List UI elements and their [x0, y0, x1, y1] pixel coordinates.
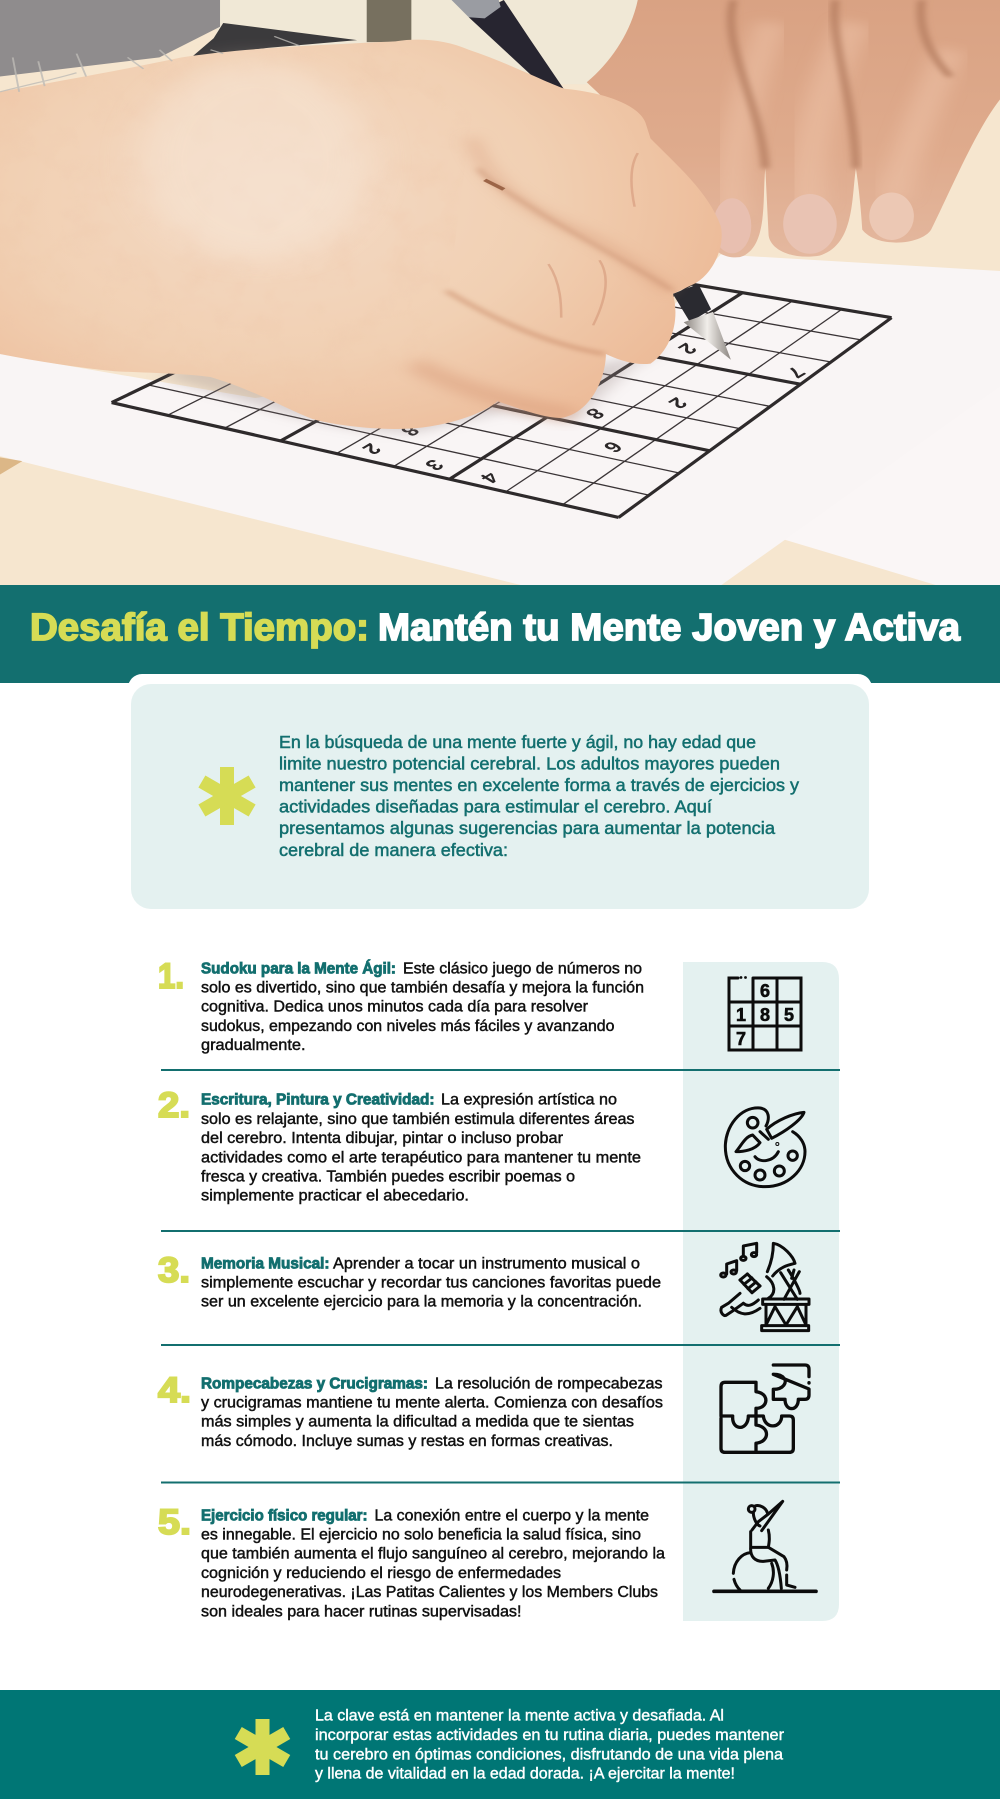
- footer text: La clave está en mantener la mente activa y desafiada. Al: [315, 1708, 724, 1725]
- photo: hand solving a sudoku: [0, 0, 1000, 586]
- body 1: cognitiva. Dedica unos minutos cada día para resolver: [201, 999, 588, 1016]
- body 5: son ideales para hacer rutinas supervisadas!: [201, 1603, 522, 1620]
- body 5: cognición y reduciendo el riesgo de enfermedades: [201, 1565, 561, 1582]
- sudoku printed digits: 2: [672, 340, 701, 357]
- footer text: incorporar estas actividades en tu rutina diaria, puedes mantener: [315, 1727, 784, 1744]
- icon: sudoku grid: 6: [760, 981, 770, 1001]
- body 2: actividades como el arte terapéutico para mantener tu mente: [201, 1149, 641, 1166]
- photo: paper sheets: [0, 254, 1000, 586]
- icon: puzzle pieces: [721, 1365, 809, 1452]
- body 2: simplemente practicar el abecedario.: [201, 1188, 469, 1205]
- intro text: actividades diseñadas para estimular el cerebro. Aquí: [279, 796, 712, 816]
- item 4: rompecabezas: [158, 1365, 809, 1452]
- body 5: que también aumenta el flujo sanguíneo al cerebro, mejorando la: [201, 1546, 665, 1563]
- body 2: fresca y creativa. También puedes escribir poemas o: [201, 1168, 575, 1186]
- photo: writing hand: [0, 36, 722, 429]
- panel: intro: [131, 684, 869, 909]
- icon: sudoku grid: 5: [784, 1005, 794, 1025]
- item 3: memoria musical: [158, 1243, 809, 1331]
- item 1: sudoku: [158, 957, 801, 1054]
- intro text: [279, 732, 799, 860]
- body 1: solo es divertido, sino que también desafía y mejora la función: [201, 980, 644, 996]
- body 3: Aprender a tocar un instrumento musical o: [333, 1255, 640, 1272]
- item 2: escritura: [158, 1086, 805, 1205]
- photo: pen upper body: [452, 0, 731, 360]
- body 2: La expresión artística no: [441, 1092, 617, 1109]
- title: Mantén tu Mente Joven y Activa: [378, 607, 961, 649]
- divider: [161, 1482, 840, 1484]
- body 4: La resolución de rompecabezas: [435, 1375, 663, 1392]
- intro text: mantener sus mentes en excelente forma a través de ejercicios y: [279, 775, 799, 795]
- icon: sudoku grid: [729, 976, 801, 1050]
- body 3: [201, 1255, 661, 1311]
- sudoku printed digits: 4: [474, 469, 504, 486]
- sudoku printed digits: 6: [598, 438, 627, 455]
- sudoku printed digits: 2: [357, 440, 386, 457]
- body 5: [201, 1507, 665, 1620]
- body 4: más simples y aumenta la dificultad a medida que te sientas: [201, 1414, 634, 1431]
- heading 4: Rompecabezas y Crucigramas:: [201, 1375, 428, 1392]
- icon: sudoku grid: 1: [736, 1005, 746, 1025]
- item 5: ejercicio: [158, 1501, 816, 1620]
- body 2: del cerebro. Intenta dibujar, pintar o incluso probar: [201, 1130, 563, 1147]
- title band: [0, 585, 1000, 683]
- heading 1: Sudoku para la Mente Ágil:: [201, 958, 396, 977]
- white tab behind intro panel: [128, 674, 872, 734]
- photo: shadow of the hand: [162, 357, 647, 436]
- icon: sudoku grid: 8: [760, 1005, 770, 1025]
- photo: sudoku grid: [110, 283, 892, 519]
- body 4: y crucigramas mantiene tu mente alerta. Comienza con desafíos: [201, 1394, 663, 1412]
- divider: [161, 1230, 840, 1232]
- icon: person exercising on ball: [714, 1501, 816, 1591]
- sudoku printed digits: 3: [419, 456, 448, 473]
- icon: paint palette: [725, 1108, 805, 1187]
- photo: right hand fingers: [587, 0, 1000, 257]
- body 5: neurodegenerativas. ¡Las Patitas Calientes y los Members Clubs: [201, 1584, 658, 1601]
- photo background: [0, 0, 1000, 586]
- number 1: 1.: [158, 957, 184, 996]
- number 5: 5.: [158, 1503, 191, 1542]
- body 4: más cómodo. Incluye sumas y restas en formas creativas.: [201, 1433, 613, 1450]
- heading 5: Ejercicio físico regular:: [201, 1507, 368, 1524]
- icon: sudoku grid: 7: [736, 1029, 746, 1049]
- title: [30, 607, 961, 649]
- icons column background: [683, 962, 839, 1621]
- sudoku printed digits: 8: [395, 421, 424, 439]
- icon: musical instruments: [721, 1243, 809, 1331]
- body 1: [201, 960, 644, 1054]
- body 1: Este clásico juego de números no: [403, 960, 642, 977]
- sudoku printed digits: [357, 340, 810, 486]
- icon: asterisk: [198, 767, 256, 825]
- sudoku printed digits: 7: [781, 363, 810, 381]
- footer text: y llena de vitalidad en la edad dorada. ¡A ejercitar la mente!: [315, 1766, 735, 1783]
- intro text: presentamos algunas sugerencias para aumentar la potencia: [279, 818, 775, 838]
- body 2: [201, 1092, 641, 1205]
- footer text: [315, 1708, 784, 1783]
- number 2: 2.: [158, 1086, 190, 1125]
- body 1: gradualmente.: [201, 1037, 306, 1054]
- icon: asterisk: [235, 1719, 290, 1775]
- body 3: simplemente escuchar y recordar tus canciones favoritas puede: [201, 1274, 661, 1292]
- number 4: 4.: [158, 1371, 191, 1410]
- number 3: 3.: [158, 1251, 190, 1290]
- body 5: La conexión entre el cuerpo y la mente: [374, 1507, 649, 1524]
- body 4: [201, 1375, 663, 1450]
- sudoku printed digits: 2: [663, 394, 692, 411]
- sudoku printed digits: 8: [580, 405, 609, 422]
- heading 3: Memoria Musical:: [201, 1255, 330, 1272]
- intro text: limite nuestro potencial cerebral. Los adultos mayores pueden: [279, 754, 780, 774]
- body 3: ser un excelente ejercicio para la memoria y la concentración.: [201, 1294, 642, 1311]
- intro text: cerebral de manera efectiva:: [279, 840, 508, 860]
- body 5: es innegable. El ejercicio no solo beneficia la salud física, sino: [201, 1526, 641, 1544]
- title: Desafía el Tiempo:: [30, 607, 369, 649]
- body 2: solo es relajante, sino que también estimula diferentes áreas: [201, 1111, 635, 1128]
- body 1: sudokus, empezando con niveles más fáciles y avanzando: [201, 1018, 615, 1035]
- divider: [161, 1344, 840, 1346]
- footer band: [0, 1690, 1000, 1799]
- divider: [161, 1069, 840, 1071]
- footer text: tu cerebro en óptimas condiciones, disfrutando de una vida plena: [315, 1746, 783, 1763]
- heading 2: Escritura, Pintura y Creatividad:: [201, 1092, 434, 1109]
- intro text: En la búsqueda de una mente fuerte y ágil, no hay edad que: [279, 732, 756, 752]
